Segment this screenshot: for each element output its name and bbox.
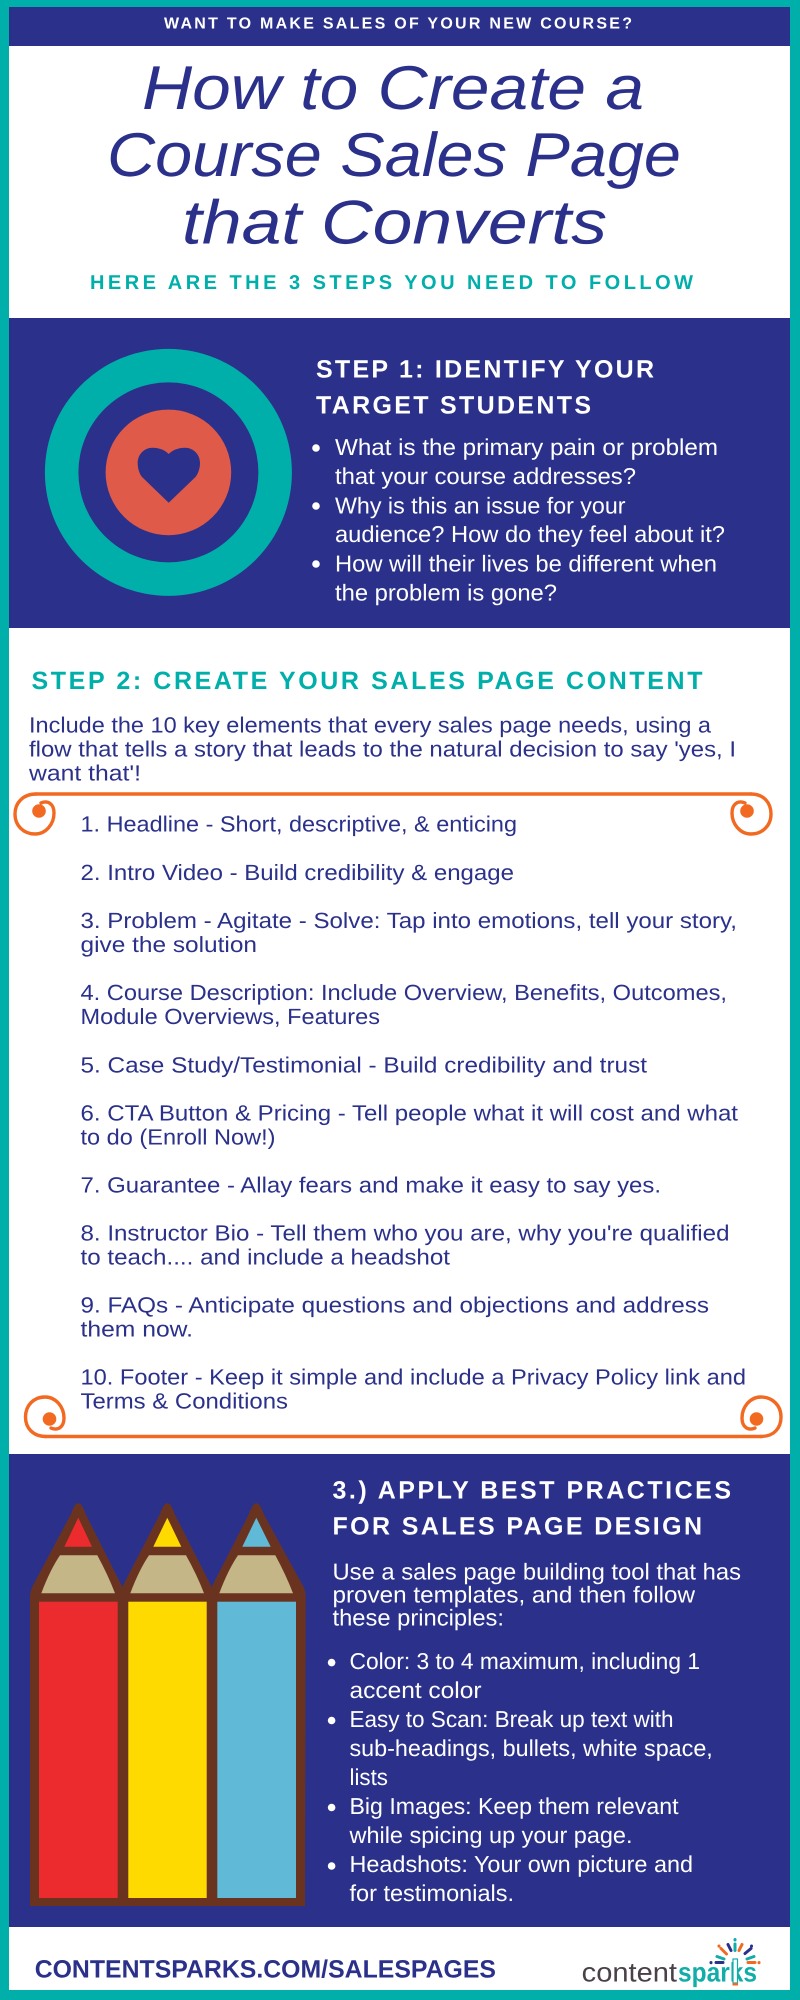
ten key elements list: 5. Case Study/Testimonial - Build credibility and trust xyxy=(80,1052,647,1077)
step 3 bullet list: Color: 3 to 4 maximum, including 1 xyxy=(350,1648,700,1674)
step 1 bullet list: How will their lives be different when xyxy=(335,550,717,576)
title: that Converts xyxy=(182,188,607,258)
top banner xyxy=(9,7,790,46)
ten key elements list: 1. Headline - Short, descriptive, & enticing xyxy=(80,812,517,837)
step 1 bullet list: the problem is gone? xyxy=(335,580,557,606)
top banner: WANT TO MAKE SALES OF YOUR NEW COURSE? xyxy=(164,16,632,32)
ten key elements list: 2. Intro Video - Build credibility & engage xyxy=(80,860,514,885)
ten key elements list: 10. Footer - Keep it simple and include a Privacy Policy link and xyxy=(80,1364,746,1389)
logo: contentsparks xyxy=(582,1940,759,1988)
step 3 heading xyxy=(332,1476,731,1541)
step 3 bullet list: Headshots: Your own picture and xyxy=(350,1851,693,1877)
ten key elements list: 3. Problem - Agitate - Solve: Tap into emotions, tell your story, xyxy=(80,908,737,933)
ten key elements list: 6. CTA Button & Pricing - Tell people what it will cost and what xyxy=(80,1100,738,1125)
title: Course Sales Page xyxy=(107,121,681,190)
logo pencil xyxy=(732,1959,738,1986)
step 3 bullet list xyxy=(328,1648,713,1906)
ten key elements list: 4. Course Description: Include Overview, Benefits, Outcomes, xyxy=(80,980,727,1005)
title xyxy=(107,54,681,258)
step 3 bullet list: lists xyxy=(350,1764,388,1790)
step 3 bullet list: Big Images: Keep them relevant xyxy=(350,1793,679,1819)
ten key elements list: 7. Guarantee - Allay fears and make it easy to say yes. xyxy=(80,1172,661,1197)
step 2 intro text: want that'! xyxy=(28,760,141,785)
ten key elements list: Module Overviews, Features xyxy=(80,1004,380,1029)
scroll ornament: bottom xyxy=(26,1397,781,1436)
step 3 bullet list: for testimonials. xyxy=(350,1880,514,1906)
step 3 bullet list: while spicing up your page. xyxy=(348,1822,632,1848)
step 2 intro text xyxy=(28,712,736,785)
logo: contentsparks: content xyxy=(582,1958,678,1988)
step 3 intro text: these principles: xyxy=(332,1604,504,1630)
step 3 intro text xyxy=(332,1558,741,1630)
step 2 heading: STEP 2: CREATE YOUR SALES PAGE CONTENT xyxy=(32,667,702,695)
step 1 bullet list: audience? How do they feel about it? xyxy=(335,521,725,547)
step 2 intro text: flow that tells a story that leads to the natural decision to say 'yes, I xyxy=(29,736,736,761)
ten key elements list: 8. Instructor Bio - Tell them who you are, why you're qualified xyxy=(80,1220,730,1245)
step 3 bullet list: accent color xyxy=(350,1677,482,1703)
ten key elements list: give the solution xyxy=(80,932,257,957)
step 1 heading: TARGET STUDENTS xyxy=(316,392,591,420)
step 3 bullet list: Easy to Scan: Break up text with xyxy=(350,1706,674,1732)
step 1 bullet list: that your course addresses? xyxy=(335,463,636,489)
step 1 heading: STEP 1: IDENTIFY YOUR xyxy=(316,356,654,384)
step 1 heading xyxy=(316,356,654,420)
ten key elements list: to do (Enroll Now!) xyxy=(80,1124,276,1149)
step 3 intro text: proven templates, and then follow xyxy=(332,1582,695,1608)
step 3 heading: 3.) APPLY BEST PRACTICES xyxy=(332,1476,731,1504)
panel: step 1 xyxy=(9,318,790,628)
logo: contentsparks: sparks xyxy=(678,1958,757,1988)
panel: step 3 xyxy=(9,1454,790,1927)
ten key elements list: 9. FAQs - Anticipate questions and objections and address xyxy=(80,1292,709,1317)
step 1 bullet list: What is the primary pain or problem xyxy=(335,434,718,460)
step 3 bullet list: sub-headings, bullets, white space, xyxy=(350,1735,713,1761)
ten key elements list: them now. xyxy=(80,1316,193,1341)
logo sparks xyxy=(711,1940,759,1963)
footer url: CONTENTSPARKS.COM/SALESPAGES xyxy=(35,1955,496,1983)
step 1 bullet list: Why is this an issue for your xyxy=(335,492,626,518)
step 1 bullet list xyxy=(312,434,725,606)
ten key elements list xyxy=(80,812,746,1413)
icon: three pencils xyxy=(30,1503,306,1906)
title: How to Create a xyxy=(142,54,644,123)
subtitle: HERE ARE THE 3 STEPS YOU NEED TO FOLLOW xyxy=(90,272,693,294)
icon: target with heart xyxy=(45,349,292,596)
ten key elements list: Terms & Conditions xyxy=(80,1388,288,1413)
step 2 intro text: Include the 10 key elements that every sales page needs, using a xyxy=(29,712,712,737)
step 3 heading: FOR SALES PAGE DESIGN xyxy=(332,1513,702,1541)
ten key elements list: to teach.... and include a headshot xyxy=(80,1244,450,1269)
step 3 intro text: Use a sales page building tool that has xyxy=(332,1558,741,1584)
scroll ornament: top xyxy=(15,794,771,834)
